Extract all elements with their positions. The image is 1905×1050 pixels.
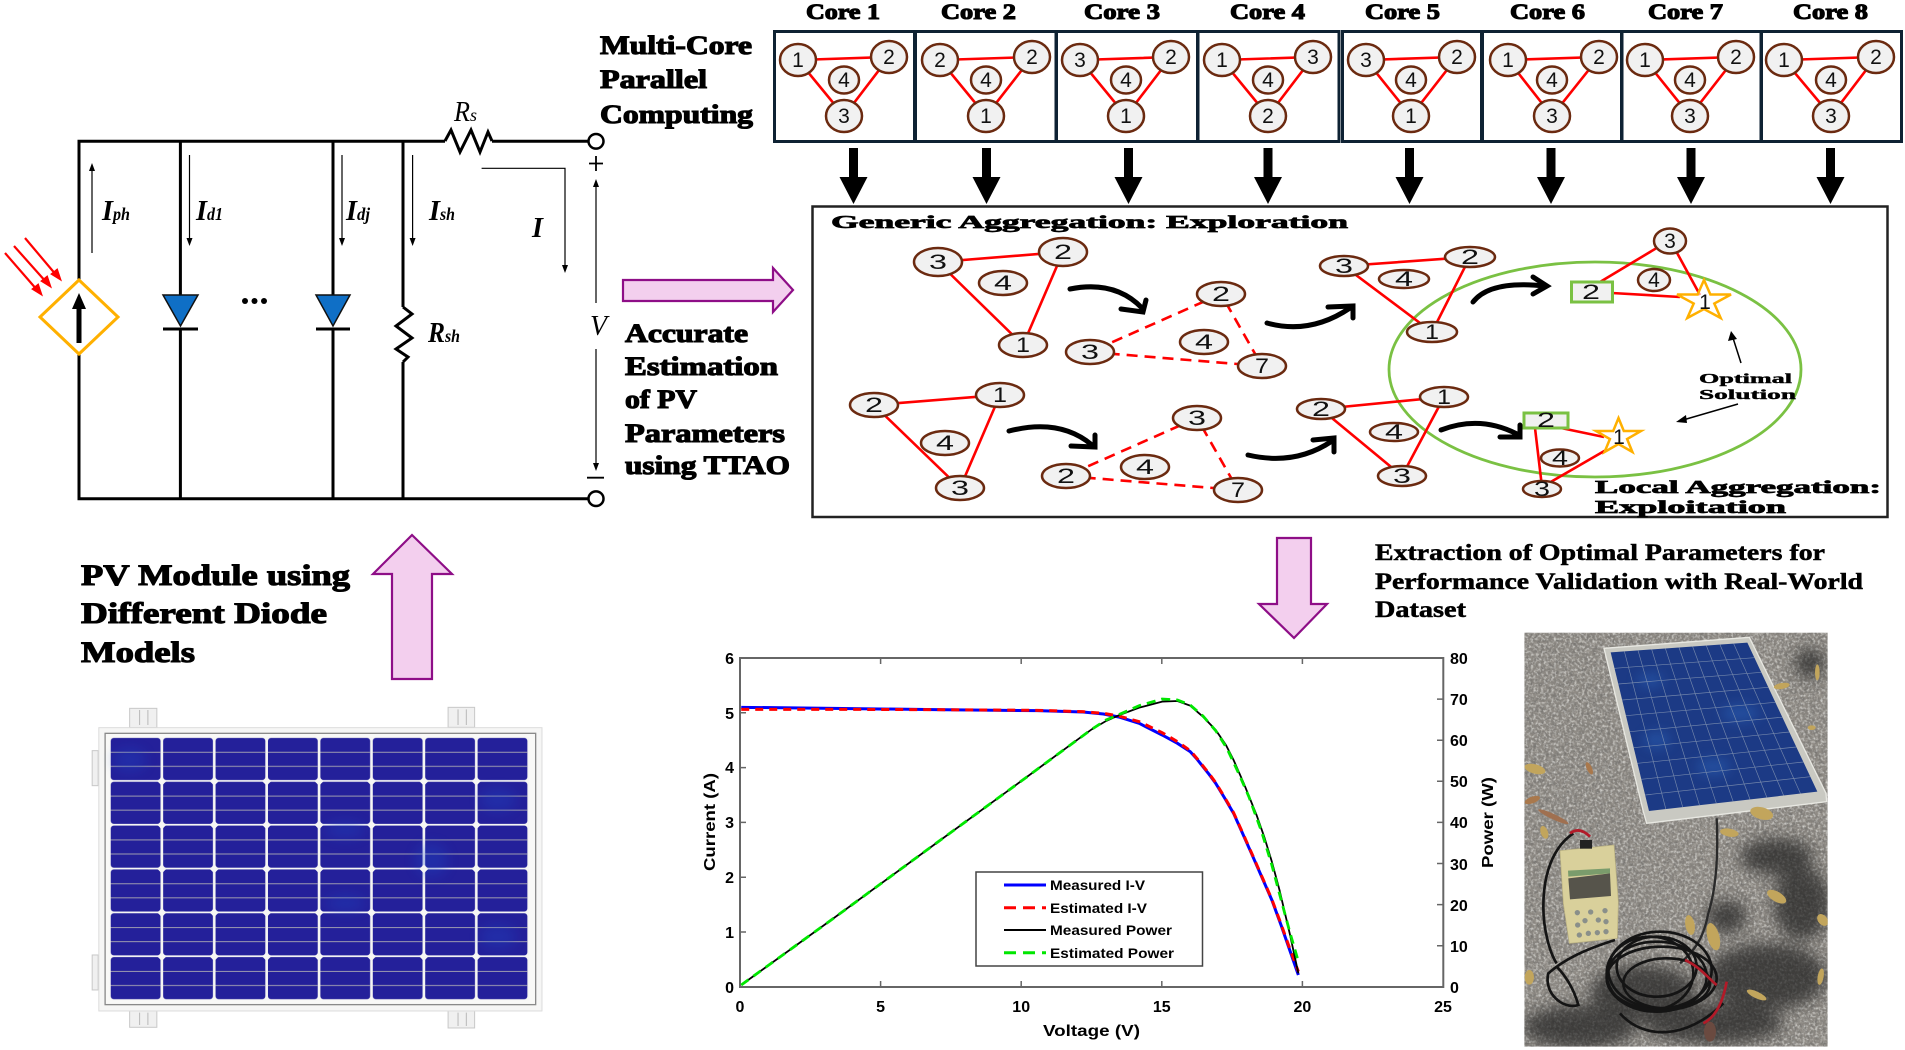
panel: core 6: 2 bbox=[1593, 46, 1605, 69]
heading: PV Module using Different Diode Models: Models bbox=[81, 636, 195, 669]
text: Accurate Estimation of PV Parameters using TTAO bbox=[625, 319, 790, 480]
terminal top bbox=[588, 134, 604, 149]
left axis labels: 0 bbox=[725, 980, 734, 997]
optimal triangle top bbox=[1572, 228, 1731, 318]
callout: Optimal Solution bbox=[1699, 372, 1796, 403]
optimal triangle bottom: 3 bbox=[1534, 478, 1550, 501]
label: Iph: I bbox=[101, 196, 114, 227]
triangle E bbox=[1320, 246, 1495, 344]
panel: core 5: 2 bbox=[1451, 46, 1463, 69]
heading: Local Aggregation: Local Aggregation: bbox=[1595, 477, 1881, 497]
triangle C: 4 bbox=[936, 432, 954, 455]
label: Rsh: R bbox=[427, 318, 445, 349]
left axis labels: 4 bbox=[725, 760, 734, 777]
right axis labels: 70 bbox=[1450, 692, 1468, 709]
text: Extraction of Optimal Parameters bbox=[1375, 540, 1863, 622]
text: Accurate Estimation of PV Parameters using TTAO: Accurate bbox=[625, 319, 748, 348]
core labels bbox=[806, 0, 1868, 24]
panel: core 5: 1 bbox=[1405, 105, 1417, 128]
right axis title: Power (W) bbox=[1480, 777, 1497, 868]
arrow: curved A to B bbox=[1070, 287, 1146, 312]
panel: aggregation bbox=[812, 206, 1888, 517]
panel: core 4: 3 bbox=[1307, 46, 1319, 69]
right axis labels: 20 bbox=[1450, 898, 1468, 915]
panel: core 4: 1 bbox=[1216, 49, 1228, 72]
label: V: V bbox=[590, 311, 610, 342]
icon: ellipsis dots bbox=[242, 298, 267, 304]
red clips bbox=[1570, 830, 1727, 1023]
chart: I-V and power curves bbox=[702, 651, 1497, 1040]
left axis labels: 5 bbox=[725, 706, 734, 723]
legend: Measured Power bbox=[1050, 922, 1173, 938]
arrow: curved D to F bbox=[1248, 438, 1334, 458]
panel cable bbox=[1680, 818, 1717, 963]
panel: core 1: 1 bbox=[792, 49, 804, 72]
optimal triangle bottom: 1 bbox=[1613, 426, 1625, 449]
heading: Local Aggregation: Exploitation bbox=[1595, 497, 1786, 517]
text: Extraction of Optimal Parameters: Extraction of Optimal Parameters for bbox=[1375, 540, 1825, 565]
triangle A: 3 bbox=[929, 251, 947, 274]
heading: Multi-Core Parallel Computing bbox=[600, 31, 753, 129]
triangle E: 1 bbox=[1425, 321, 1439, 344]
left axis labels bbox=[725, 651, 734, 997]
text: Extraction of Optimal Parameters: Dataset bbox=[1375, 597, 1466, 622]
triangle A: 2 bbox=[1054, 241, 1072, 264]
curve: estimated I-V bbox=[741, 709, 1298, 972]
text: Extraction of Optimal Parameters: Performance Validation with Real-World bbox=[1375, 569, 1863, 594]
mounting clips bbox=[92, 707, 475, 1028]
solar panel frame bbox=[1604, 637, 1827, 823]
terminal bottom bbox=[588, 491, 604, 506]
arrow: Idj bbox=[339, 155, 345, 246]
panel: core 7: 2 bbox=[1730, 46, 1742, 69]
right axis labels: 10 bbox=[1450, 939, 1468, 956]
label: Id1: I bbox=[195, 196, 208, 227]
legend: Estimated I-V bbox=[1050, 900, 1148, 916]
triangle E: 2 bbox=[1461, 246, 1479, 269]
arrow: Iph bbox=[89, 163, 95, 253]
cell junction diamonds bbox=[158, 777, 481, 961]
panel: core 4: 4 bbox=[1262, 69, 1274, 92]
image: blue solar panel module bbox=[92, 707, 542, 1028]
arrow: curved B to E bbox=[1267, 306, 1353, 327]
triangle F: 4 bbox=[1385, 421, 1403, 444]
series curves bbox=[741, 699, 1298, 985]
triangle E: 4 bbox=[1395, 268, 1413, 291]
triangle B dashed: 7 bbox=[1255, 355, 1269, 378]
panel: core 5 bbox=[1342, 32, 1482, 142]
triangle C bbox=[850, 383, 1024, 500]
panel: core 7: 1 bbox=[1639, 49, 1651, 72]
x axis labels: 25 bbox=[1434, 999, 1452, 1016]
right axis labels: 50 bbox=[1450, 774, 1468, 791]
triangle E: 3 bbox=[1335, 255, 1353, 278]
label: Id1 bbox=[195, 196, 223, 227]
left axis labels: 1 bbox=[725, 925, 734, 942]
label: Rs: s bbox=[470, 105, 477, 125]
legend bbox=[976, 872, 1202, 966]
panel: core 3: 4 bbox=[1120, 69, 1132, 92]
heading: PV Module using Different Diode Models bbox=[81, 559, 350, 669]
panel: core 6 bbox=[1482, 32, 1622, 142]
arrow: Ish bbox=[410, 155, 416, 246]
x axis title: Voltage (V) bbox=[1043, 1023, 1140, 1040]
panel: core 7: 3 bbox=[1684, 105, 1696, 128]
heading: PV Module using Different Diode Models: PV Module using bbox=[81, 559, 350, 592]
optimal triangle top: 3 bbox=[1664, 230, 1676, 253]
right axis labels: 40 bbox=[1450, 815, 1468, 832]
triangle F: 3 bbox=[1393, 465, 1411, 488]
circuit wires bbox=[79, 141, 588, 499]
meter cable coil bbox=[1543, 833, 1723, 1032]
legend: Measured I-V bbox=[1050, 877, 1146, 893]
label: Idj: dj bbox=[357, 204, 371, 224]
arrow: callout to bottom star bbox=[1676, 404, 1738, 423]
triangle C: 2 bbox=[865, 394, 883, 417]
panel: core 7 bbox=[1622, 32, 1761, 142]
label: Id1: d1 bbox=[207, 204, 223, 224]
panel: core 8: 2 bbox=[1870, 46, 1882, 69]
optimal triangle top: 1 bbox=[1699, 291, 1711, 314]
plus sign bbox=[589, 156, 603, 171]
image: field test photo with solar panel and I-V tracer bbox=[1523, 633, 1831, 1048]
left axis title: Current (A) bbox=[702, 773, 719, 871]
curve: measured I-V bbox=[741, 707, 1298, 975]
label: Idj: I bbox=[345, 196, 358, 227]
panel: core 2: 2 bbox=[1026, 46, 1038, 69]
triangle F bbox=[1297, 386, 1468, 488]
panel: core 2: 2 bbox=[934, 49, 946, 72]
panel: core 2: 1 bbox=[980, 105, 992, 128]
left axis labels: 3 bbox=[725, 815, 734, 832]
heading: Local Aggregation bbox=[1595, 477, 1881, 517]
local aggregation region ellipse bbox=[1389, 262, 1801, 477]
axis ticks bbox=[740, 658, 1443, 987]
circuit: PV diode equivalent model bbox=[5, 97, 610, 506]
curve: estimated power bbox=[741, 699, 1298, 985]
heading: Multi-Core Parallel Computing: Multi-Core bbox=[600, 31, 752, 60]
optimal triangle top: 2 bbox=[1582, 281, 1600, 304]
panel: core 1: 4 bbox=[838, 69, 850, 92]
triangle F: 1 bbox=[1437, 386, 1451, 409]
panel: core 7: 4 bbox=[1684, 69, 1696, 92]
x axis labels bbox=[736, 999, 1452, 1016]
triangle B dashed: 2 bbox=[1212, 283, 1230, 306]
panel: core 8: 3 bbox=[1825, 105, 1837, 128]
solar cells grid bbox=[110, 737, 529, 1000]
triangle D dashed bbox=[1042, 406, 1262, 502]
label: Rsh bbox=[427, 318, 460, 349]
label: Idj bbox=[345, 196, 371, 227]
triangle C: 3 bbox=[951, 477, 969, 500]
panel: core 6: 1 bbox=[1502, 49, 1514, 72]
label: Rs: R bbox=[453, 97, 470, 128]
callout: Optimal Solution: Solution bbox=[1699, 388, 1796, 403]
triangle D dashed: 3 bbox=[1188, 407, 1206, 430]
arrow: curved E to best bbox=[1473, 277, 1547, 302]
arrow: purple right bbox=[623, 268, 793, 312]
arrows: cores down to aggregation panel bbox=[840, 148, 1844, 204]
panel: core 6: 4 bbox=[1546, 69, 1558, 92]
tree shadow bbox=[1523, 648, 1830, 1048]
label: Iph: ph bbox=[111, 204, 130, 224]
label: Ish: I bbox=[428, 196, 441, 227]
triangle B dashed: 4 bbox=[1195, 331, 1213, 354]
right axis labels: 30 bbox=[1450, 857, 1468, 874]
triangle F: 2 bbox=[1312, 398, 1330, 421]
triangle D dashed: 4 bbox=[1136, 456, 1154, 479]
triangle D dashed: 7 bbox=[1231, 479, 1245, 502]
plot frame bbox=[740, 658, 1443, 987]
x axis labels: 15 bbox=[1153, 999, 1171, 1016]
triangle D dashed: 2 bbox=[1057, 465, 1075, 488]
series resistor Rs bbox=[445, 130, 492, 152]
arrow: curved C to D bbox=[1009, 427, 1095, 447]
arrow: Id1 bbox=[186, 155, 192, 246]
optimal triangle top: 4 bbox=[1648, 269, 1660, 292]
panel: core 1 bbox=[774, 32, 914, 142]
right axis labels: 0 bbox=[1450, 980, 1459, 997]
arrow: purple down bbox=[1259, 538, 1327, 638]
x axis labels: 5 bbox=[876, 999, 885, 1016]
icon: incident light rays bbox=[5, 238, 60, 294]
arrow: output current I bbox=[482, 168, 568, 273]
panel: core 1: 3 bbox=[838, 105, 850, 128]
panel: core 2: 4 bbox=[980, 69, 992, 92]
triangle A: 4 bbox=[994, 272, 1012, 295]
panel: core 5: 3 bbox=[1360, 49, 1372, 72]
label: I: I bbox=[531, 213, 544, 244]
label: Ish bbox=[428, 196, 455, 227]
optimal triangle bottom: 2 bbox=[1537, 409, 1555, 432]
x axis labels: 20 bbox=[1294, 999, 1311, 1016]
arrow: callout to top star bbox=[1728, 331, 1741, 363]
callout: Optimal Solution: Optimal bbox=[1699, 372, 1792, 387]
label: Iph bbox=[101, 196, 130, 227]
I-V tracer meter bbox=[1560, 840, 1618, 943]
shunt resistor Rsh bbox=[396, 307, 412, 362]
right axis labels: 80 bbox=[1450, 651, 1468, 668]
panel: core 3: 2 bbox=[1165, 46, 1177, 69]
panel: core 4 bbox=[1198, 32, 1339, 142]
icon: diode j bbox=[316, 295, 350, 329]
x axis labels: 0 bbox=[736, 999, 745, 1016]
solar panel cells bbox=[1611, 643, 1817, 811]
panel: core 3: 3 bbox=[1074, 49, 1086, 72]
icon: diode 1 bbox=[163, 295, 198, 329]
triangle C: 1 bbox=[993, 384, 1007, 407]
arrow: voltage V bbox=[593, 179, 599, 471]
text: Accurate Estimation of PV Parameters using TTAO: of PV bbox=[625, 385, 697, 414]
triangle B dashed bbox=[1066, 282, 1286, 378]
triangle B dashed: 3 bbox=[1081, 341, 1099, 364]
panel: core 3: 1 bbox=[1120, 105, 1132, 128]
optimal triangle bottom bbox=[1523, 409, 1641, 501]
panel: core 4: 2 bbox=[1262, 105, 1274, 128]
heading: PV Module using Different Diode Models: Different Diode bbox=[81, 597, 327, 630]
arrow: curved F to best bbox=[1441, 423, 1520, 437]
left axis labels: 6 bbox=[725, 651, 734, 668]
ground bbox=[1524, 633, 1828, 1047]
legend: Estimated Power bbox=[1050, 945, 1175, 961]
heading: Multi-Core Parallel Computing: Computing bbox=[600, 100, 753, 129]
heading: Multi-Core Parallel Computing: Parallel bbox=[600, 65, 707, 94]
triangle A bbox=[914, 238, 1087, 357]
text: Accurate Estimation of PV Parameters using TTAO: using TTAO bbox=[625, 451, 790, 480]
left axis labels: 2 bbox=[725, 870, 734, 887]
label: Ish: sh bbox=[439, 204, 455, 224]
panel: core 1: 2 bbox=[883, 46, 895, 69]
right axis labels bbox=[1450, 651, 1468, 997]
panel: core 8: 1 bbox=[1778, 49, 1790, 72]
arrow: purple up bbox=[373, 535, 452, 679]
panel: core 6: 3 bbox=[1546, 105, 1558, 128]
label: Rsh: sh bbox=[444, 326, 460, 346]
panel: core 3 bbox=[1056, 32, 1198, 142]
triangle A: 1 bbox=[1016, 334, 1030, 357]
icon: current source diamond bbox=[40, 280, 118, 354]
curve: measured power bbox=[741, 701, 1298, 985]
fallen leaves bbox=[1523, 664, 1831, 1042]
text: Accurate Estimation of PV Parameters using TTAO: Estimation bbox=[625, 352, 779, 381]
heading: Generic Aggregation: Generic Aggregation: Exploration bbox=[831, 212, 1348, 232]
optimal triangle bottom: 4 bbox=[1552, 447, 1568, 470]
panel: core 8: 4 bbox=[1825, 69, 1837, 92]
text: Accurate Estimation of PV Parameters using TTAO: Parameters bbox=[625, 419, 785, 448]
minus sign bbox=[587, 477, 604, 479]
panel: core 5: 4 bbox=[1405, 69, 1417, 92]
panel: core 8 bbox=[1762, 32, 1902, 142]
panel: core 2 bbox=[916, 32, 1056, 142]
x axis labels: 10 bbox=[1012, 999, 1030, 1016]
right axis labels: 60 bbox=[1450, 733, 1468, 750]
